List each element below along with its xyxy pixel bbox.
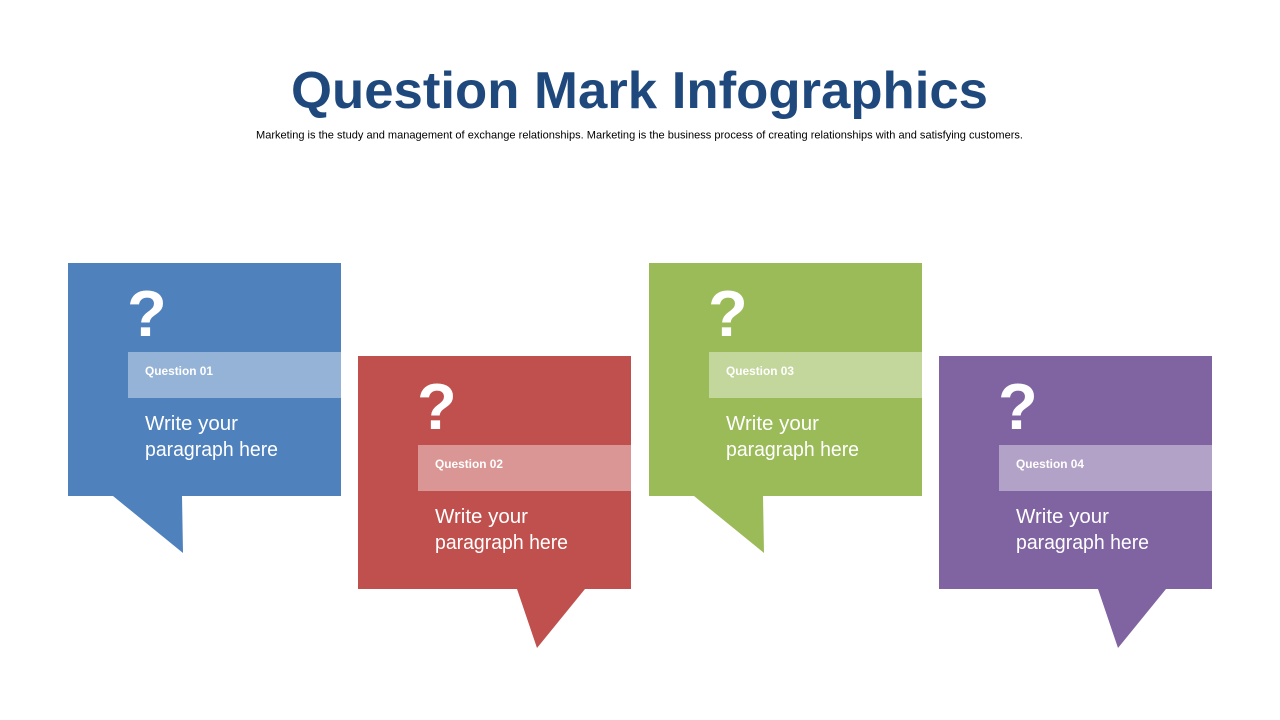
label: Question 01: [145, 364, 213, 378]
label: Question 02: [435, 457, 503, 471]
icon: question mark: ?: [998, 370, 1038, 443]
label band: [128, 352, 341, 398]
paragraph: [435, 506, 568, 554]
speech bubble: [358, 356, 631, 648]
paragraph: paragraph here: [726, 439, 859, 461]
label band: [418, 445, 631, 491]
label band: [709, 352, 922, 398]
paragraph: Write your: [145, 413, 238, 435]
panel: question 01: [68, 263, 341, 553]
paragraph: Write your: [726, 413, 819, 435]
speech bubble: [939, 356, 1212, 648]
paragraph: paragraph here: [435, 532, 568, 554]
label: Question 03: [726, 364, 794, 378]
title: Question Mark Infographics: [291, 62, 988, 120]
icon: question mark: ?: [708, 277, 748, 350]
label band: [999, 445, 1212, 491]
paragraph: [726, 413, 859, 461]
subtitle: Marketing is the study and management of exchange relationships. Marketing is the business process of creating relationships with and satisfying customers.: [256, 130, 1023, 142]
panel: question 04: [939, 356, 1212, 648]
paragraph: paragraph here: [1016, 532, 1149, 554]
paragraph: Write your: [435, 506, 528, 528]
speech bubble: [68, 263, 341, 553]
panel: question 02: [358, 356, 631, 648]
label: Question 04: [1016, 457, 1084, 471]
icon: question mark: ?: [127, 277, 167, 350]
speech bubble: [649, 263, 922, 553]
paragraph: [145, 413, 278, 461]
paragraph: [1016, 506, 1149, 554]
icon: question mark: ?: [417, 370, 457, 443]
paragraph: Write your: [1016, 506, 1109, 528]
paragraph: paragraph here: [145, 439, 278, 461]
panel: question 03: [649, 263, 922, 553]
